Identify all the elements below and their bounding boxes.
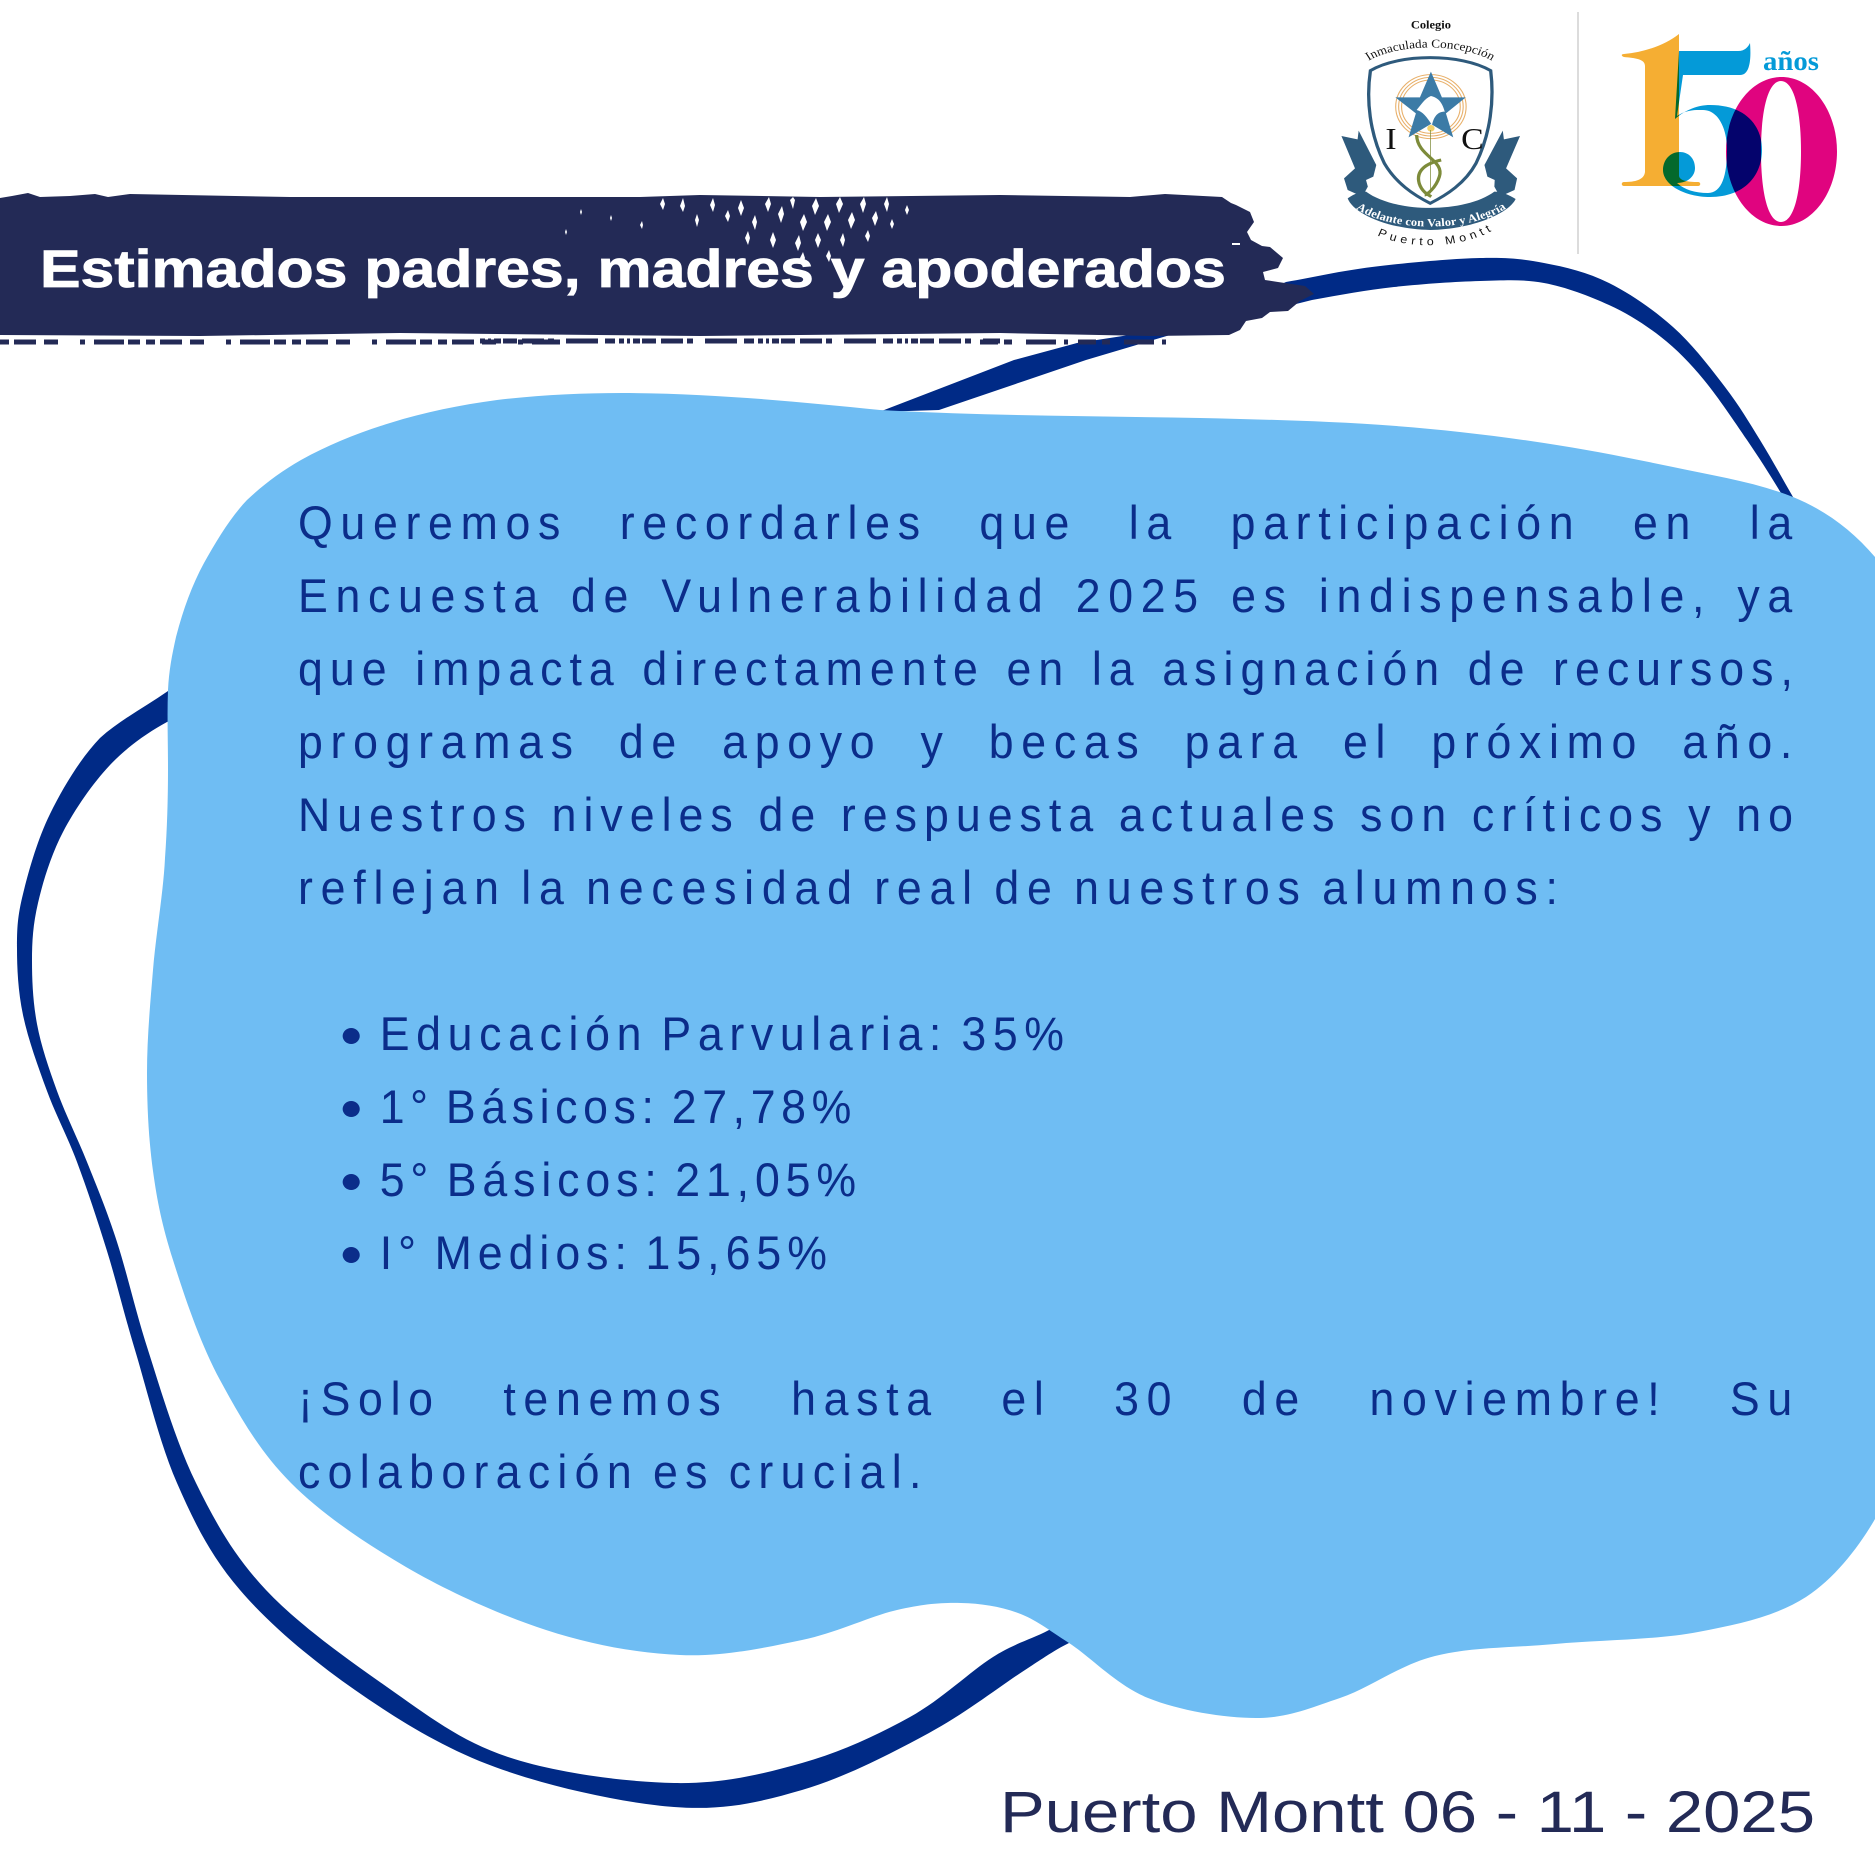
digit 5 <box>1663 43 1762 197</box>
divider <box>1577 12 1579 254</box>
ribbon motto: Adelante con Valor y Alegría <box>1356 204 1506 227</box>
light blue blob panel <box>147 393 1875 1718</box>
body text: I° Medios: 15,65% <box>380 1226 833 1279</box>
ribbon tails <box>1341 131 1376 197</box>
body text: 1° Básicos: 27,78% <box>380 1080 857 1133</box>
body text: Encuesta de Vulnerabilidad 2025 es indispensable, ya <box>298 569 1800 622</box>
brush residue below banner <box>0 341 1175 342</box>
body text: Nuestros niveles de respuesta actuales son críticos y no <box>298 788 1800 841</box>
logo: Colegio Inmaculada Concepción crest <box>1342 18 1520 246</box>
body text: 5° Básicos: 21,05% <box>380 1153 862 1206</box>
digit 1 <box>1622 34 1700 186</box>
title text: Estimados padres, madres y apoderados <box>40 240 1226 299</box>
logo: Colegio Inmaculada Concepción crest: Inmaculada Concepción <box>1364 40 1494 61</box>
body text: colaboración es crucial. <box>298 1445 929 1498</box>
años label: años <box>1763 46 1819 76</box>
letter I: I <box>1385 121 1397 156</box>
helix <box>1417 135 1441 197</box>
letter C: C <box>1461 121 1484 156</box>
heading: Colegio <box>1411 18 1451 31</box>
lily <box>1417 96 1445 125</box>
rings <box>1396 75 1466 139</box>
date text: Puerto Montt 06 - 11 - 2025 <box>1000 1780 1815 1845</box>
decorative ring outline <box>17 258 1797 1808</box>
body text: ¡Solo tenemos hasta el 30 de noviembre! Su <box>298 1372 1800 1425</box>
star <box>1395 72 1466 137</box>
ribbon banner <box>1348 192 1516 230</box>
body text: programas de apoyo y becas para el próximo año. <box>298 715 1800 768</box>
body text: Queremos recordarles que la participación en la <box>298 496 1800 549</box>
body text: que impacta directamente en la asignación de recursos, <box>298 642 1800 695</box>
body text: reflejan la necesidad real de nuestros alumnos: <box>298 861 1566 914</box>
digit 0 <box>1726 77 1837 226</box>
body text <box>298 496 1800 1498</box>
logo: 150 años <box>1622 34 1837 226</box>
title banner <box>0 193 1314 342</box>
brush speckles <box>565 197 1240 264</box>
city name: Puerto Montt <box>1378 225 1492 246</box>
body text: Educación Parvularia: 35% <box>380 1007 1071 1060</box>
shield <box>1369 58 1492 203</box>
